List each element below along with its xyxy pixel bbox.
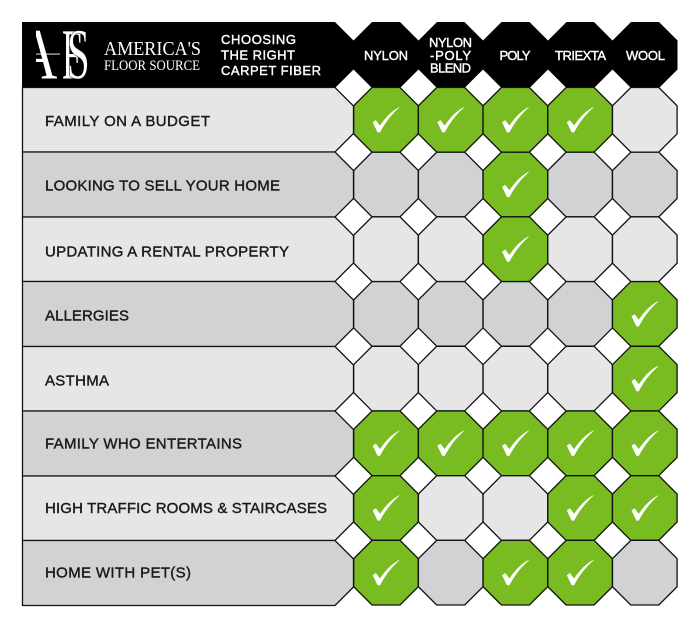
chart title: THE RIGHT [221,48,295,62]
column heading: nylon-poly blend [429,35,472,76]
row: updating a rental property: UPDATING A RENTAL PROPERTY [45,244,289,260]
row: home with pets: HOME WITH PET(S) [45,564,191,582]
row: asthma [22,346,677,411]
logo wordmark: FLOOR SOURCE [104,58,200,74]
column heading: nylon: NYLON [364,48,408,63]
row: family on a budget [22,88,677,152]
column heading: wool: WOOL [626,48,665,63]
row: family who entertains [22,411,677,476]
logo wordmark: AMERICA'S [104,39,201,60]
logo monogram: S [67,15,90,94]
row: updating a rental property [22,217,677,282]
column heading: triexta: TRIEXTA [555,48,606,63]
row: high traffic rooms and staircases: HIGH TRAFFIC ROOMS & STAIRCASES [45,500,327,517]
header banner [18,14,678,95]
logo wordmark [104,39,201,74]
row: looking to sell your home [22,152,677,217]
row: asthma: ASTHMA [45,372,109,390]
column heading: nylon-poly blend: BLEND [430,60,471,76]
column heading: nylon-poly blend: -POLY [430,48,471,63]
chart title: CHOOSING [221,32,296,47]
logo monogram: A [18,14,57,94]
row: home with pets [22,540,677,606]
logo monogram: F [62,15,82,95]
row: high traffic rooms and staircases [22,476,677,540]
column heading: poly: POLY [500,48,531,63]
chart title: CARPET FIBER [221,63,321,78]
row: allergies [22,282,677,346]
chart title [221,32,321,78]
row: looking to sell your home: LOOKING TO SELL YOUR HOME [45,178,280,194]
column heading: nylon-poly blend: NYLON [429,35,472,50]
row: family on a budget: FAMILY ON A BUDGET [45,113,210,130]
row: allergies: ALLERGIES [45,308,129,324]
logo monogram [18,14,90,95]
row: family who entertains: FAMILY WHO ENTERTAINS [45,436,242,452]
